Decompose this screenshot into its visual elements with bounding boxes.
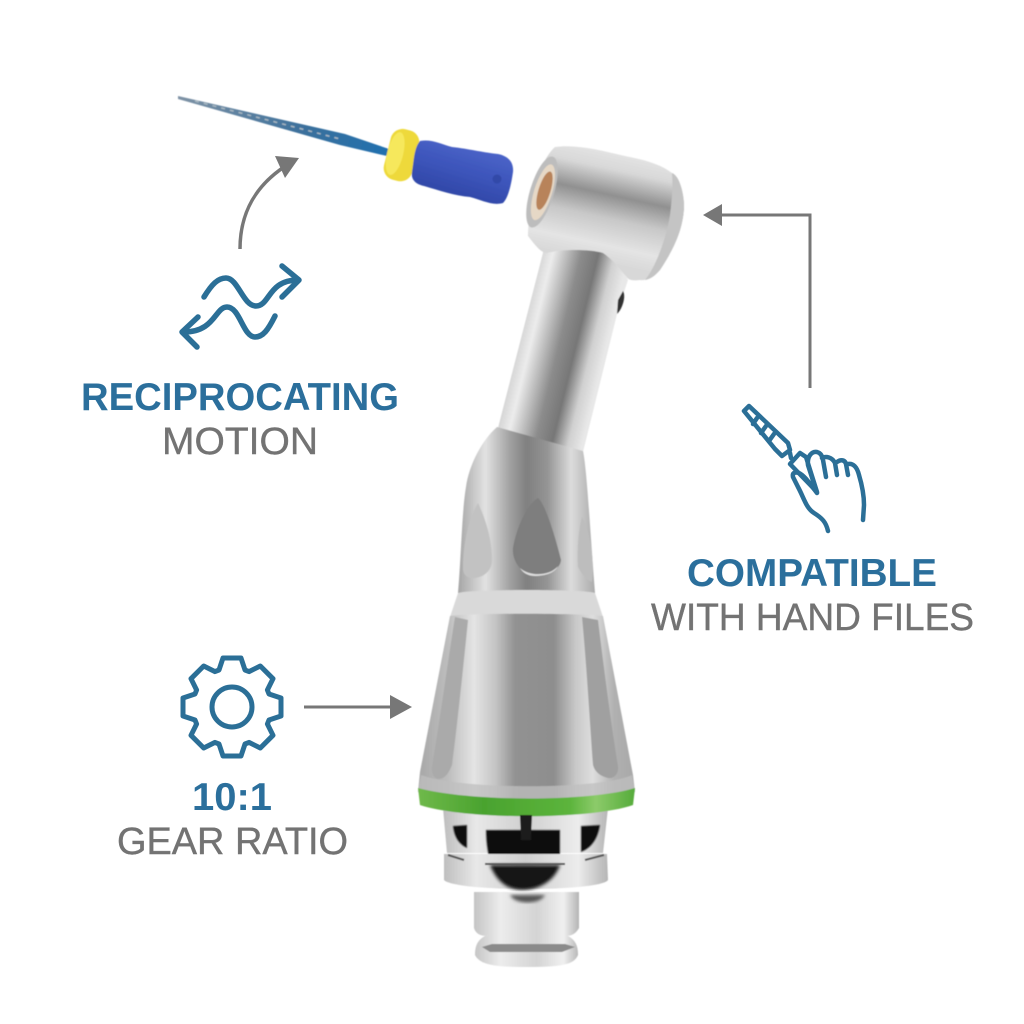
lower body	[418, 614, 635, 801]
centre upper groove	[513, 498, 561, 574]
lower rim highlight	[418, 775, 635, 801]
file shaft	[178, 96, 392, 157]
arrow to head	[703, 204, 810, 388]
screw	[617, 291, 624, 314]
heading: compatible with hand files: COMPATIBLE	[687, 552, 937, 595]
connector tip	[475, 936, 578, 967]
heading: reciprocating motion: RECIPROCATING	[81, 376, 399, 419]
centre notch	[520, 815, 532, 840]
endodontic file	[178, 96, 513, 204]
icon: hand holding file	[744, 406, 864, 531]
chrome collar	[443, 808, 608, 853]
green ring	[418, 788, 635, 816]
heading: gear ratio	[117, 776, 348, 863]
stem	[474, 892, 579, 936]
blue handle	[412, 141, 513, 204]
icon: reciprocating waves	[182, 266, 299, 347]
heading: gear ratio: GEAR RATIO	[117, 821, 348, 863]
heading: compatible with hand files	[651, 552, 974, 639]
right upper groove	[578, 517, 593, 582]
heading: reciprocating motion: MOTION	[162, 421, 318, 463]
neck	[498, 245, 628, 452]
left upper groove	[463, 503, 492, 578]
flange	[444, 854, 608, 889]
arrow to gear section	[304, 695, 412, 719]
left lower groove	[432, 617, 468, 779]
heading: gear ratio: 10:1	[192, 776, 272, 819]
right lower groove	[582, 617, 618, 778]
yellow stopper	[381, 126, 422, 184]
collar band	[450, 590, 603, 617]
handle dimple	[492, 174, 502, 184]
copper chuck opening	[520, 153, 564, 231]
file flutes	[195, 101, 340, 139]
dark reflections	[453, 825, 600, 862]
upper body	[458, 427, 595, 593]
heading: reciprocating motion	[81, 376, 399, 463]
head	[528, 146, 684, 280]
heading: compatible with hand files: WITH HAND FILES	[651, 597, 974, 639]
head end cap	[645, 173, 684, 280]
curved arrow to file	[240, 156, 299, 249]
icon: gear	[183, 658, 281, 756]
handpiece	[418, 146, 684, 967]
